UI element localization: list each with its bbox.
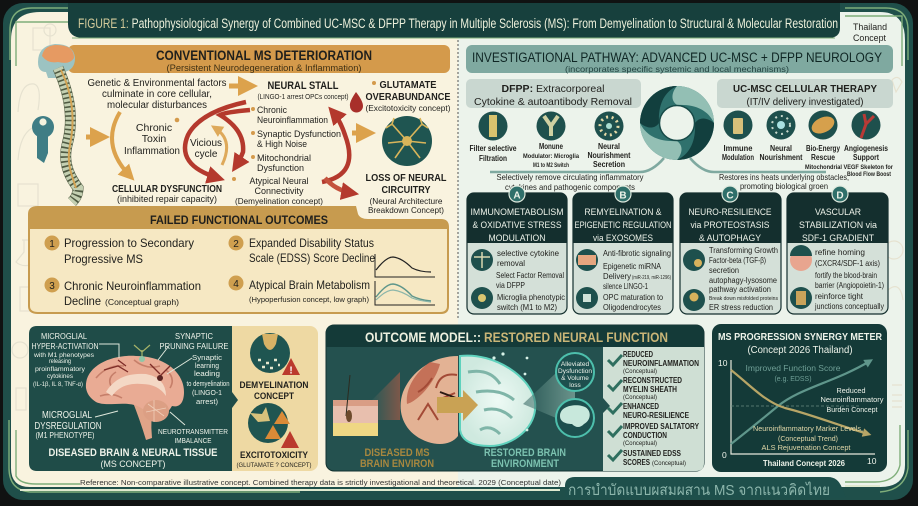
UC-MSC icon labels: Modulation bbox=[722, 153, 754, 162]
icon: filter bbox=[478, 112, 508, 140]
label: synaptic pruning failure: to demyelination bbox=[186, 381, 230, 388]
outcome 2: 2 bbox=[233, 239, 239, 250]
label: microglial dysregulation bbox=[34, 410, 102, 440]
text: chronic toxin inflammation: Inflammation bbox=[124, 145, 180, 157]
label: microglial dysregulation: (M1 PHENOTYPE) bbox=[36, 431, 95, 440]
card A bbox=[467, 186, 567, 314]
card A: via DFPP bbox=[496, 281, 525, 290]
thailand concept tag: Thailand bbox=[853, 22, 887, 32]
card D: reinforce tight bbox=[815, 292, 864, 301]
icon: central spiral bbox=[490, 86, 826, 172]
heading band: (incorporates specific systemic and local mechanisms) bbox=[565, 64, 789, 74]
label: diseased brain heading bbox=[48, 447, 218, 470]
DFPP icons bbox=[478, 112, 624, 140]
card C: Transforming Growth bbox=[709, 246, 778, 255]
list: neural stall effects: (Demyelination concept) bbox=[235, 196, 323, 206]
card D bbox=[787, 186, 888, 314]
label: microglial hyper-activation bbox=[32, 331, 98, 388]
card C: pathway activation bbox=[709, 285, 771, 294]
card A: Microglia phenotypic bbox=[497, 293, 565, 302]
card A: selective cytokine bbox=[497, 249, 560, 258]
panel: conventional MS deterioration bbox=[32, 44, 451, 215]
card B: OPC maturation to bbox=[603, 293, 663, 302]
list: neural stall effects: Synaptic Dysfunction bbox=[257, 129, 341, 140]
chart: synergy curves bbox=[718, 358, 884, 468]
card D: (CXCR4/SDF-1 axis) bbox=[815, 259, 880, 268]
label: synaptic pruning failure: leading bbox=[194, 371, 220, 378]
list: neural stall effects: Connectivity bbox=[254, 186, 304, 197]
label: diseased brain heading: (MS CONCEPT) bbox=[100, 459, 166, 470]
label: microglial hyper-activation: MICROGLIAL bbox=[41, 331, 87, 341]
label: diseased environment: DISEASED MS bbox=[364, 447, 430, 459]
text: chronic toxin inflammation bbox=[124, 122, 180, 157]
Thai banner: การบำบัดแบบผสมผสาน MS จากแนวคิดไทย bbox=[568, 481, 830, 499]
card C: via PROTEOSTASIS bbox=[690, 220, 770, 231]
list: outcomes checklist: (Conceptual) bbox=[623, 369, 657, 375]
list: outcomes checklist: REDUCED bbox=[623, 350, 653, 359]
label: demyelination concept: CONCEPT bbox=[254, 391, 294, 402]
label: synaptic pruning failure: SYNAPTIC bbox=[175, 331, 213, 341]
DFPP icon labels: Monune bbox=[539, 142, 563, 151]
panel: synergy meter bbox=[712, 324, 887, 472]
text: UC-MSC summary: promoting biological groen bbox=[740, 181, 828, 191]
UC-MSC box bbox=[717, 79, 893, 108]
chart: synergy curves: Burden Concept bbox=[826, 405, 878, 414]
chart: synergy curves: Improved Function Score bbox=[746, 363, 841, 373]
text: glutamate overabundance: GLUTAMATE bbox=[380, 79, 436, 91]
badge B: B bbox=[619, 190, 627, 202]
label: microglial hyper-activation: with M1 phenotypes bbox=[33, 352, 95, 359]
illustration: restored brain half bbox=[460, 352, 535, 446]
panel: investigational pathway bbox=[466, 45, 894, 314]
callout: alleviated dysfunction bbox=[556, 353, 594, 391]
text: glutamate overabundance: OVERABUNDANCE bbox=[366, 91, 450, 103]
UC-MSC icon labels: Blood Flow Boost bbox=[847, 172, 891, 178]
card C: & AUTOPHAGY bbox=[699, 233, 762, 244]
mini chart: hypoperfusion bbox=[375, 281, 435, 305]
heading band: CONVENTIONAL MS DETERIORATION bbox=[156, 48, 372, 63]
text: loss of neural circuitry: (Neural Architecture bbox=[370, 196, 443, 206]
icon: OPC bbox=[576, 287, 598, 309]
UC-MSC icon labels: Neural bbox=[770, 144, 792, 153]
label: neurotransmitter imbalance bbox=[158, 427, 229, 445]
UC-MSC icon labels: Rescue bbox=[811, 153, 835, 162]
list: neural stall effects: Chronic bbox=[257, 105, 287, 116]
label: microglial hyper-activation: releasing bbox=[49, 358, 71, 365]
list: outcomes checklist: CONDUCTION bbox=[623, 431, 667, 440]
heading: FAILED FUNCTIONAL OUTCOMES bbox=[150, 213, 328, 227]
card D: barrier (Angiopoietin-1) bbox=[815, 281, 884, 290]
card A: Select Factor Removal bbox=[496, 271, 564, 280]
outcome 3: Chronic Neuroinflammation bbox=[64, 279, 201, 293]
label: synaptic pruning failure: PRUNING FAILURE bbox=[160, 341, 229, 351]
icon: vessel wall bbox=[790, 245, 812, 271]
card C: Break down misfolded proteins bbox=[709, 296, 778, 302]
list: outcomes checklist: (Conceptual) bbox=[623, 395, 657, 401]
card B: Delivery bbox=[603, 272, 631, 281]
icon: blood vessel bbox=[852, 110, 880, 140]
list: outcomes checklist: IMPROVED SALTATORY bbox=[623, 422, 700, 431]
heading: OUTCOME MODEL:: bbox=[365, 330, 481, 345]
icon: autophagy bbox=[683, 289, 705, 311]
card B: (miR-219, miR-1296) bbox=[632, 275, 671, 281]
chart: synergy curves: Thailand Concept 2026 bbox=[763, 458, 845, 468]
card C: Factor-beta (TGF-β) bbox=[709, 256, 766, 265]
panel: outcome model bbox=[326, 325, 704, 471]
UC-MSC icon labels: Immune bbox=[724, 144, 753, 153]
icon: tissue bbox=[576, 249, 598, 271]
heading: (Concept 2026 Thailand) bbox=[748, 345, 852, 356]
text: DFPP summary bbox=[496, 172, 644, 192]
label: diseased brain heading: DISEASED BRAIN & NEURAL TISSUE bbox=[48, 447, 218, 459]
label: microglial hyper-activation: cytokines bbox=[47, 373, 74, 380]
DFPP icon labels: Modulator: Microglia bbox=[523, 153, 579, 160]
illustration: skin cross-section bbox=[333, 372, 400, 436]
text: vicious cycle: cycle bbox=[195, 149, 218, 160]
text: cellular dysfunction: (inhibited repair capacity) bbox=[117, 194, 217, 204]
text: genetic factors: Genetic & Environmental factors bbox=[88, 78, 226, 89]
mini chart: EDSS decline bbox=[375, 254, 435, 277]
callout: alleviated dysfunction: Dysfunction bbox=[558, 368, 592, 375]
outcome 4: 4 bbox=[233, 279, 239, 290]
chart: synergy curves: Neuroinflammatory Marker Levels, bbox=[753, 424, 863, 433]
label: demyelination concept: DEMYELINATION bbox=[240, 380, 309, 391]
text: neural stall: (LINGO-1 arrest OPCs concept) bbox=[258, 92, 349, 101]
text: glutamate overabundance: (Excitotoxicity concept) bbox=[366, 103, 451, 113]
label: diseased environment bbox=[360, 447, 434, 470]
title bar bbox=[68, 3, 840, 38]
DFPP icon labels: Nourishment bbox=[588, 151, 631, 160]
illustration: diseased brain half bbox=[401, 356, 458, 444]
text: DFPP summary: Selectively remove circulating inflammatory bbox=[496, 172, 644, 182]
card A: switch (M1 to M2) bbox=[497, 303, 557, 312]
label: synaptic pruning failure: arrest) bbox=[196, 399, 218, 406]
callout: alleviated dysfunction: loss bbox=[569, 382, 582, 389]
list: neural stall effects: Atypical Neural bbox=[250, 176, 308, 187]
outcome 3: Decline bbox=[64, 294, 101, 308]
card D: STABILIZATION via bbox=[799, 220, 878, 231]
icon: TGF beta bbox=[683, 249, 705, 271]
list: outcomes checklist: ENHANCED bbox=[623, 402, 659, 411]
card B: Oligodendrocytes bbox=[603, 303, 661, 312]
list: neural stall effects: Mitochondrial bbox=[257, 153, 311, 164]
card C: autophagy-lysosome bbox=[709, 276, 778, 285]
list: outcomes checklist: SCORES bbox=[623, 458, 651, 467]
heading: RESTORED NEURAL FUNCTION bbox=[484, 330, 668, 345]
DFPP box bbox=[466, 79, 641, 108]
list: outcomes checklist: (Conceptual) bbox=[652, 461, 686, 467]
label: synaptic pruning failure: Synaptic bbox=[192, 355, 223, 362]
card D: VASCULAR bbox=[815, 207, 861, 218]
arrow: to neural circuitry bbox=[352, 130, 368, 136]
label: neurotransmitter imbalance: NEUROTRANSMITTER bbox=[158, 427, 229, 436]
chart: synergy curves: ALS Rejuvenation Concept bbox=[762, 443, 851, 452]
outcome 1 bbox=[44, 236, 194, 266]
DFPP icon labels: Neural bbox=[598, 142, 620, 151]
thailand concept tag bbox=[853, 22, 887, 43]
DFPP icon labels bbox=[470, 142, 631, 169]
text: vicious cycle: Vicious bbox=[190, 138, 222, 149]
label: neurotransmitter imbalance: IMBALANCE bbox=[174, 436, 212, 445]
outcome 2: Expanded Disability Status bbox=[249, 236, 374, 250]
checkmarks bbox=[608, 355, 622, 460]
icon: neuron bbox=[382, 116, 432, 166]
label: diseased environment: BRAIN ENVIRON bbox=[360, 458, 434, 470]
list: outcomes checklist: SUSTAINED EDSS bbox=[623, 449, 682, 458]
card B bbox=[573, 186, 673, 314]
badge C: C bbox=[726, 190, 734, 202]
chart: synergy curves: (e.g. EDSS) bbox=[774, 374, 812, 383]
icon: head and spine bbox=[38, 44, 78, 202]
DFPP icon labels: M1 to M2 Switch bbox=[533, 162, 569, 169]
UC-MSC box: UC-MSC CELLULAR THERAPY bbox=[733, 83, 877, 95]
UC-MSC icon labels: Bio-Energy bbox=[806, 144, 840, 153]
vicious cycle arrows bbox=[185, 102, 352, 193]
text: neural stall: NEURAL STALL bbox=[268, 80, 339, 92]
card A: & OXIDATIVE STRESS bbox=[472, 220, 562, 231]
label: excitotoxicity: (GLUTAMATE ? CONCEPT) bbox=[236, 462, 312, 469]
icon: demyelination: ! bbox=[289, 366, 293, 376]
text: genetic factors bbox=[88, 78, 226, 111]
DFPP icon labels: Filtration bbox=[479, 154, 507, 163]
faint background icons bbox=[12, 24, 903, 410]
chart: synergy curves: Neuroinflammatory bbox=[820, 395, 884, 404]
outcome 1: Progressive MS bbox=[64, 252, 143, 266]
card A: MODULATION bbox=[488, 233, 546, 244]
icon: excitotoxicity bbox=[248, 403, 299, 448]
icon: immune modulation bbox=[724, 110, 752, 140]
card B: Anti-fibrotic signaling bbox=[603, 249, 671, 258]
card D: fortify the blood-brain bbox=[815, 271, 877, 280]
UC-MSC box: (IT/IV delivery investigated) bbox=[746, 97, 864, 108]
outcome 2 bbox=[228, 236, 375, 265]
icon: demyelination bbox=[250, 333, 300, 376]
icon: neural nourishment bbox=[766, 110, 796, 140]
text: loss of neural circuitry bbox=[366, 172, 447, 215]
callout: alleviated dysfunction: Alleviated bbox=[561, 361, 589, 368]
label: synaptic pruning failure: learning bbox=[195, 363, 219, 370]
heading band bbox=[466, 45, 893, 74]
thailand concept tag: Concept bbox=[853, 33, 886, 43]
footer reference: Reference: Non-comparative illustrative concept. Combined therapy data is strictly investigational and theoretical. 2029 (Conceptual date) bbox=[80, 478, 562, 487]
chart: synergy curves: (Conceptual Trend) bbox=[778, 434, 838, 443]
list: outcomes checklist: (Conceptual) bbox=[623, 441, 657, 447]
panel: diseased brain and neural tissue bbox=[29, 326, 318, 471]
list: outcomes checklist bbox=[603, 347, 704, 471]
card A: removal bbox=[497, 259, 525, 268]
icon: mitochondrion bbox=[808, 110, 838, 140]
UC-MSC icon labels: Support bbox=[853, 153, 879, 162]
chart: synergy curves: 10 bbox=[867, 456, 877, 466]
label: microglial hyper-activation: (IL-1β, IL 8, TNF-α) bbox=[33, 382, 83, 388]
arrow: genetic to cellular dysfunction bbox=[112, 112, 130, 176]
badge D: D bbox=[836, 190, 844, 202]
UC-MSC icon labels: Nourishment bbox=[760, 153, 803, 162]
panel: failed functional outcomes bbox=[28, 206, 449, 314]
heading band bbox=[68, 45, 450, 73]
DFPP box: DFPP: Extracorporeal bbox=[502, 83, 604, 95]
text: loss of neural circuitry: LOSS OF NEURAL bbox=[366, 172, 447, 184]
list: neural stall effects bbox=[232, 105, 341, 206]
callout: brain icon bbox=[556, 399, 594, 437]
text: vicious cycle bbox=[190, 138, 222, 160]
card B: silence LINGO-1 bbox=[603, 282, 648, 291]
DFPP icon labels: Secretion bbox=[593, 160, 625, 169]
list: outcomes checklist: NEURO-RESILIENCE bbox=[623, 411, 690, 420]
label: microglial dysregulation: DYSREGULATION bbox=[34, 421, 102, 432]
illustration: brain bbox=[86, 344, 192, 440]
card B: Epigenetic miRNA bbox=[603, 262, 662, 271]
label: restored environment bbox=[484, 447, 566, 470]
label: synaptic pruning failure bbox=[160, 331, 230, 406]
card C bbox=[680, 186, 781, 314]
icon: glutamate drop bbox=[350, 92, 363, 113]
card B: REMYELINATION & bbox=[584, 207, 662, 218]
DFPP icon labels: Filter selective bbox=[470, 144, 517, 153]
UC-MSC icons bbox=[724, 110, 880, 140]
card D: junctions conceptually bbox=[814, 302, 884, 311]
UC-MSC icon labels: Mitochondrial VEGF Skeleton for bbox=[805, 165, 894, 171]
list: outcomes checklist: NEUROINFLAMMATION bbox=[623, 359, 699, 368]
text: cellular dysfunction: CELLULAR DYSFUNCTION bbox=[112, 184, 222, 195]
badge A: A bbox=[513, 190, 521, 202]
cone to circles bbox=[523, 373, 575, 418]
icon: antibody bbox=[536, 112, 566, 140]
icon: scales bbox=[471, 249, 493, 271]
DFPP box: Cytokine & autoantibody Removal bbox=[474, 96, 632, 108]
text: neural stall bbox=[258, 80, 349, 101]
outcome 3 bbox=[44, 278, 201, 308]
icon: microglia bbox=[471, 287, 493, 309]
text: UC-MSC summary bbox=[719, 172, 849, 191]
label: excitotoxicity bbox=[236, 450, 312, 469]
list: neural stall effects: & High Noise bbox=[257, 139, 307, 150]
card C: ER stress reduction bbox=[709, 303, 773, 312]
card C: secretion bbox=[709, 266, 739, 275]
text: loss of neural circuitry: Breakdown Concept) bbox=[368, 205, 444, 215]
card B: via EXOSOMES bbox=[593, 233, 653, 244]
text: chronic toxin inflammation: Chronic bbox=[136, 122, 172, 134]
label: synaptic pruning failure: (LINGO-1 bbox=[192, 390, 222, 397]
icon: secretion bbox=[594, 112, 624, 140]
text: genetic factors: molecular disturbances bbox=[107, 100, 207, 111]
UC-MSC icon labels bbox=[722, 144, 894, 178]
outcome 4: (Hypoperfusion concept, low graph) bbox=[249, 295, 369, 304]
label: microglial dysregulation: MICROGLIAL bbox=[42, 410, 92, 421]
heading band: (Persistent Neurodegeneration & Inflammation) bbox=[166, 63, 362, 73]
text: glutamate overabundance bbox=[366, 79, 451, 113]
list: outcomes checklist: MYELIN SHEATH bbox=[623, 385, 677, 394]
outcome 2: Scale (EDSS) Score Decline bbox=[249, 251, 375, 265]
outcome 1: 1 bbox=[49, 239, 55, 250]
text: DFPP summary: cytokines and pathogenic components bbox=[505, 182, 635, 192]
list: neural stall effects: Dysfunction bbox=[257, 163, 304, 174]
chart: synergy curves: 0 bbox=[722, 450, 727, 460]
card A: IMMUNOMETABOLISM bbox=[470, 207, 564, 218]
outcome 1: Progression to Secondary bbox=[64, 236, 194, 250]
text: chronic toxin inflammation: Toxin bbox=[142, 133, 166, 145]
text: loss of neural circuitry: CIRCUITRY bbox=[382, 184, 430, 196]
label: restored environment: RESTORED BRAIN bbox=[484, 447, 566, 459]
chart: synergy curves: Reduced bbox=[836, 386, 866, 395]
chart: synergy curves: 10 bbox=[718, 358, 728, 368]
label: demyelination concept bbox=[240, 380, 309, 402]
list: outcomes checklist: RECONSTRUCTED bbox=[623, 376, 682, 385]
outcome 4 bbox=[228, 276, 370, 304]
arrow: genetic to neural stall bbox=[229, 84, 250, 88]
label: excitotoxicity: EXCITOTOXICITY bbox=[240, 450, 309, 461]
label: microglial hyper-activation: HYPER-ACTIVATION bbox=[32, 341, 98, 351]
icon: tight junction bbox=[790, 287, 812, 309]
arrow: to spine bbox=[86, 134, 102, 140]
outcome 3: (Conceptual graph) bbox=[105, 298, 179, 307]
card D: refine homing bbox=[815, 248, 865, 257]
text: genetic factors: culminate in core cellular, bbox=[102, 89, 212, 100]
label: restored environment: ENVIRONMENT bbox=[491, 458, 559, 470]
heading bbox=[718, 331, 882, 356]
card D: SDF-1 GRADIENT bbox=[802, 233, 874, 244]
card C: NEURO-RESILIENCE bbox=[688, 207, 772, 218]
list: neural stall effects: Neuroinflammation bbox=[257, 115, 328, 126]
UC-MSC icon labels: Angiogenesis bbox=[844, 144, 888, 153]
outcome 4: Atypical Brain Metabolism bbox=[249, 278, 370, 292]
text: cellular dysfunction bbox=[112, 184, 222, 204]
arrow: diseased to restored bbox=[437, 390, 478, 421]
heading bbox=[365, 330, 668, 345]
card B: EPIGENETIC REGULATION bbox=[574, 220, 672, 231]
text: UC-MSC summary: Restores ins heats underlying obstacles, bbox=[719, 172, 849, 182]
heading: MS PROGRESSION SYNERGY METER bbox=[718, 331, 882, 343]
callout: alleviated dysfunction: & Volume bbox=[561, 375, 589, 382]
outcome 3: 3 bbox=[49, 281, 55, 292]
icon: key bbox=[32, 116, 54, 163]
label: microglial hyper-activation: proinflammatory bbox=[35, 366, 86, 373]
